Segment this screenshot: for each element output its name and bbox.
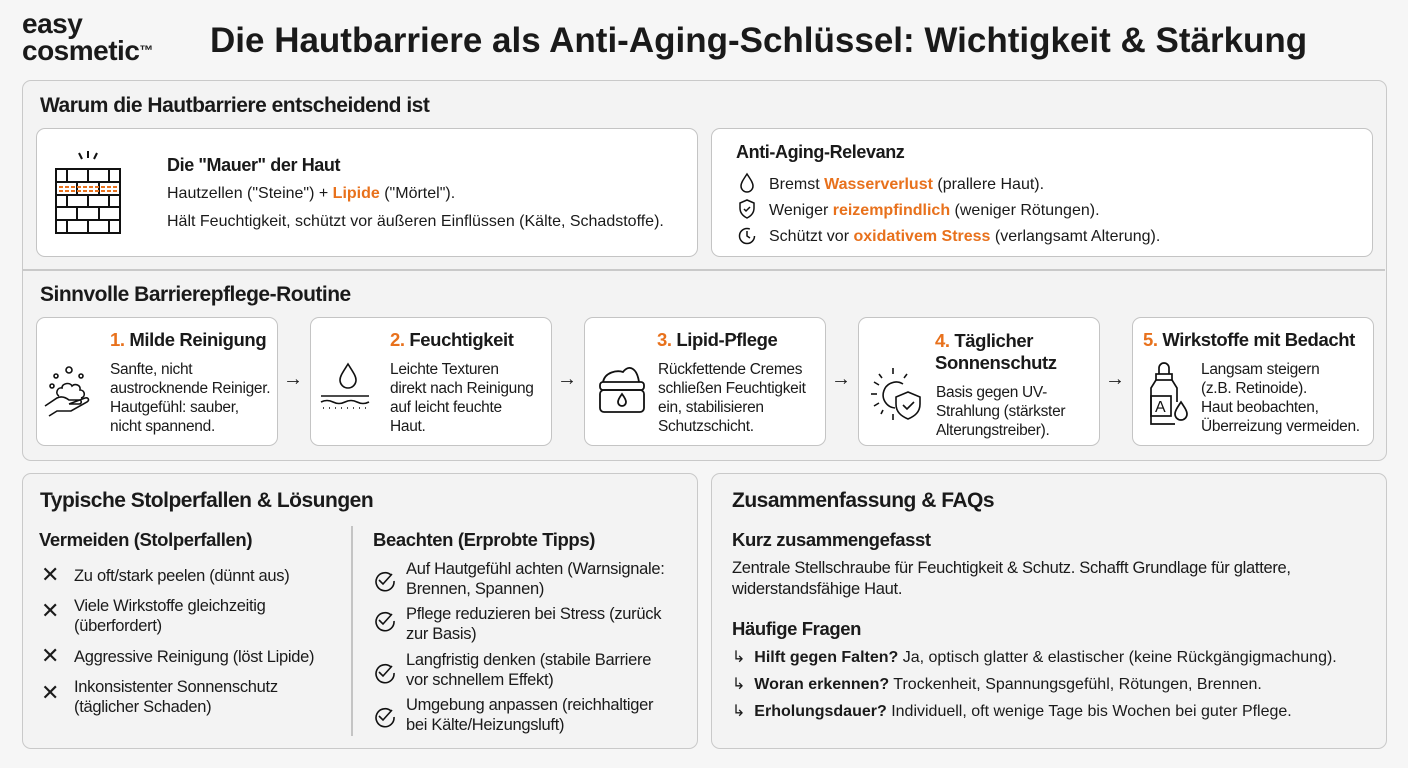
column: vermeiden: Aggressive Reinigung (löst Lipide)	[74, 648, 314, 666]
icon: drop on skin	[320, 362, 370, 409]
text: mauer: Die "Mauer" der Haut	[167, 155, 340, 175]
icon: cream jar	[599, 367, 645, 413]
step 4: 4. Täglicher	[935, 330, 1033, 351]
summary: Kurz zusammengefasst	[732, 529, 931, 550]
column: vermeiden: Viele Wirkstoffe gleichzeitig	[74, 597, 266, 615]
column: vermeiden: Inkonsistenter Sonnenschutz	[74, 678, 278, 696]
step 3: Rückfettende Cremes	[658, 361, 802, 378]
summary: widerstandsfähige Haut.	[732, 580, 902, 598]
step 4: Strahlung (stärkster	[936, 403, 1065, 420]
step 1: Sanfte, nicht	[110, 361, 192, 378]
column: beachten: Beachten (Erprobte Tipps)	[373, 529, 595, 550]
summary	[732, 529, 1291, 598]
text: mauer: Hält Feuchtigkeit, schützt vor äußeren Einflüssen (Kälte, Schadstoffe).	[167, 213, 664, 230]
step 5	[1132, 317, 1374, 446]
step 4	[858, 317, 1100, 446]
step 1: nicht spannend.	[110, 418, 215, 435]
icon: serum bottle: A	[1155, 399, 1166, 416]
step 5: 5. Wirkstoffe mit Bedacht	[1143, 329, 1355, 350]
step 2: auf leicht feuchte	[390, 399, 502, 416]
column: vermeiden: (täglicher Schaden)	[74, 698, 211, 716]
heading: routine: Sinnvolle Barrierepflege-Routine	[40, 283, 351, 306]
step 5: Überreizung vermeiden.	[1201, 418, 1360, 435]
icon: sun shield	[871, 368, 921, 420]
column: vermeiden: ✕	[41, 598, 59, 623]
step 3: 3. Lipid-Pflege	[657, 329, 777, 350]
column: vermeiden: Vermeiden (Stolperfallen)	[39, 529, 252, 550]
step 4: Sonnenschutz	[935, 352, 1057, 373]
list: relevanz: Schützt vor oxidativem Stress (verlangsamt Alterung).	[769, 228, 1160, 245]
icon: brick wall	[55, 151, 121, 234]
step 3: schließen Feuchtigkeit	[658, 380, 806, 397]
panel: zusammenfassung: Zusammenfassung & FAQs	[732, 489, 994, 512]
column: beachten: Umgebung anpassen (reichhaltiger	[406, 696, 653, 714]
step 1: austrocknende Reiniger.	[110, 380, 270, 397]
icons: relevanz	[738, 172, 756, 244]
step 4: Basis gegen UV-	[936, 384, 1047, 401]
card: anti-aging	[711, 128, 1373, 257]
step 2: 2. Feuchtigkeit	[390, 329, 514, 350]
panel: stolperfallen: Typische Stolperfallen & Lösungen	[40, 489, 373, 512]
text: mauer: Hautzellen ("Steine") + Lipide ("Mörtel").	[167, 185, 455, 202]
logo: cosmetic™	[22, 35, 153, 66]
faqs	[732, 618, 1337, 720]
step 5: (z.B. Retinoide).	[1201, 380, 1307, 397]
faqs: ↳ Woran erkennen? Trockenheit, Spannungsgefühl, Rötungen, Brennen.	[732, 676, 1262, 693]
arrow: →	[283, 368, 303, 390]
step 5: Haut beobachten,	[1201, 399, 1319, 416]
column: beachten: bei Kälte/Heizungsluft)	[406, 716, 564, 734]
arrow: →	[1105, 368, 1125, 390]
panel: stolperfallen	[22, 473, 698, 749]
step 2	[310, 317, 552, 446]
panel: top	[22, 80, 1387, 461]
step 3	[584, 317, 826, 446]
column: vermeiden: ✕	[41, 680, 59, 705]
column: vermeiden: ✕	[41, 562, 59, 587]
logo	[22, 8, 153, 66]
step 2: direkt nach Reinigung	[390, 380, 534, 397]
faqs: ↳ Hilft gegen Falten? Ja, optisch glatter & elastischer (keine Rückgängigmachung).	[732, 649, 1337, 666]
step 3: ein, stabilisieren	[658, 399, 764, 416]
step 3: Schutzschicht.	[658, 418, 754, 435]
step 2: Leichte Texturen	[390, 361, 499, 378]
column: beachten: Pflege reduzieren bei Stress (zurück	[406, 605, 661, 623]
column: beachten: Brennen, Spannen)	[406, 580, 544, 598]
list: relevanz	[769, 176, 1160, 245]
title: Die Hautbarriere als Anti-Aging-Schlüssel: Wichtigkeit & Stärkung	[210, 21, 1307, 60]
column: vermeiden: Zu oft/stark peelen (dünnt aus)	[74, 567, 289, 585]
step 1: 1. Milde Reinigung	[110, 329, 266, 350]
icon: serum bottle	[1150, 362, 1188, 425]
summary: Zentrale Stellschraube für Feuchtigkeit & Schutz. Schafft Grundlage für glattere,	[732, 559, 1291, 577]
step 1: Hautgefühl: sauber,	[110, 399, 239, 416]
column: beachten	[373, 529, 665, 734]
logo: easy	[22, 8, 82, 39]
card: anti-aging: Anti-Aging-Relevanz	[736, 142, 904, 162]
panel: zusammenfassung	[711, 473, 1387, 749]
faqs: Häufige Fragen	[732, 618, 861, 639]
list: relevanz: Weniger reizempfindlich (weniger Rötungen).	[769, 202, 1100, 219]
step 4: Alterungstreiber).	[936, 422, 1049, 439]
column: vermeiden: ✕	[41, 643, 59, 668]
icon: foam hand	[44, 366, 90, 417]
list: relevanz: Bremst Wasserverlust (prallere Haut).	[769, 176, 1044, 193]
arrow: →	[831, 368, 851, 390]
column: vermeiden	[39, 529, 314, 716]
column: beachten: zur Basis)	[406, 625, 476, 643]
column: vermeiden: (überfordert)	[74, 617, 162, 635]
heading: warum: Warum die Hautbarriere entscheidend ist	[40, 94, 429, 117]
column: beachten: Auf Hautgefühl achten (Warnsignale:	[406, 560, 665, 578]
card: mauer	[36, 128, 698, 257]
arrow: →	[557, 368, 577, 390]
text: mauer	[167, 155, 664, 230]
step 2: Haut.	[390, 418, 426, 435]
step 1	[36, 317, 278, 446]
step 5: Langsam steigern	[1201, 361, 1319, 378]
column: beachten: vor schnellem Effekt)	[406, 671, 553, 689]
faqs: ↳ Erholungsdauer? Individuell, oft wenige Tage bis Wochen bei guter Pflege.	[732, 703, 1292, 720]
column: beachten: Langfristig denken (stabile Barriere	[406, 651, 651, 669]
